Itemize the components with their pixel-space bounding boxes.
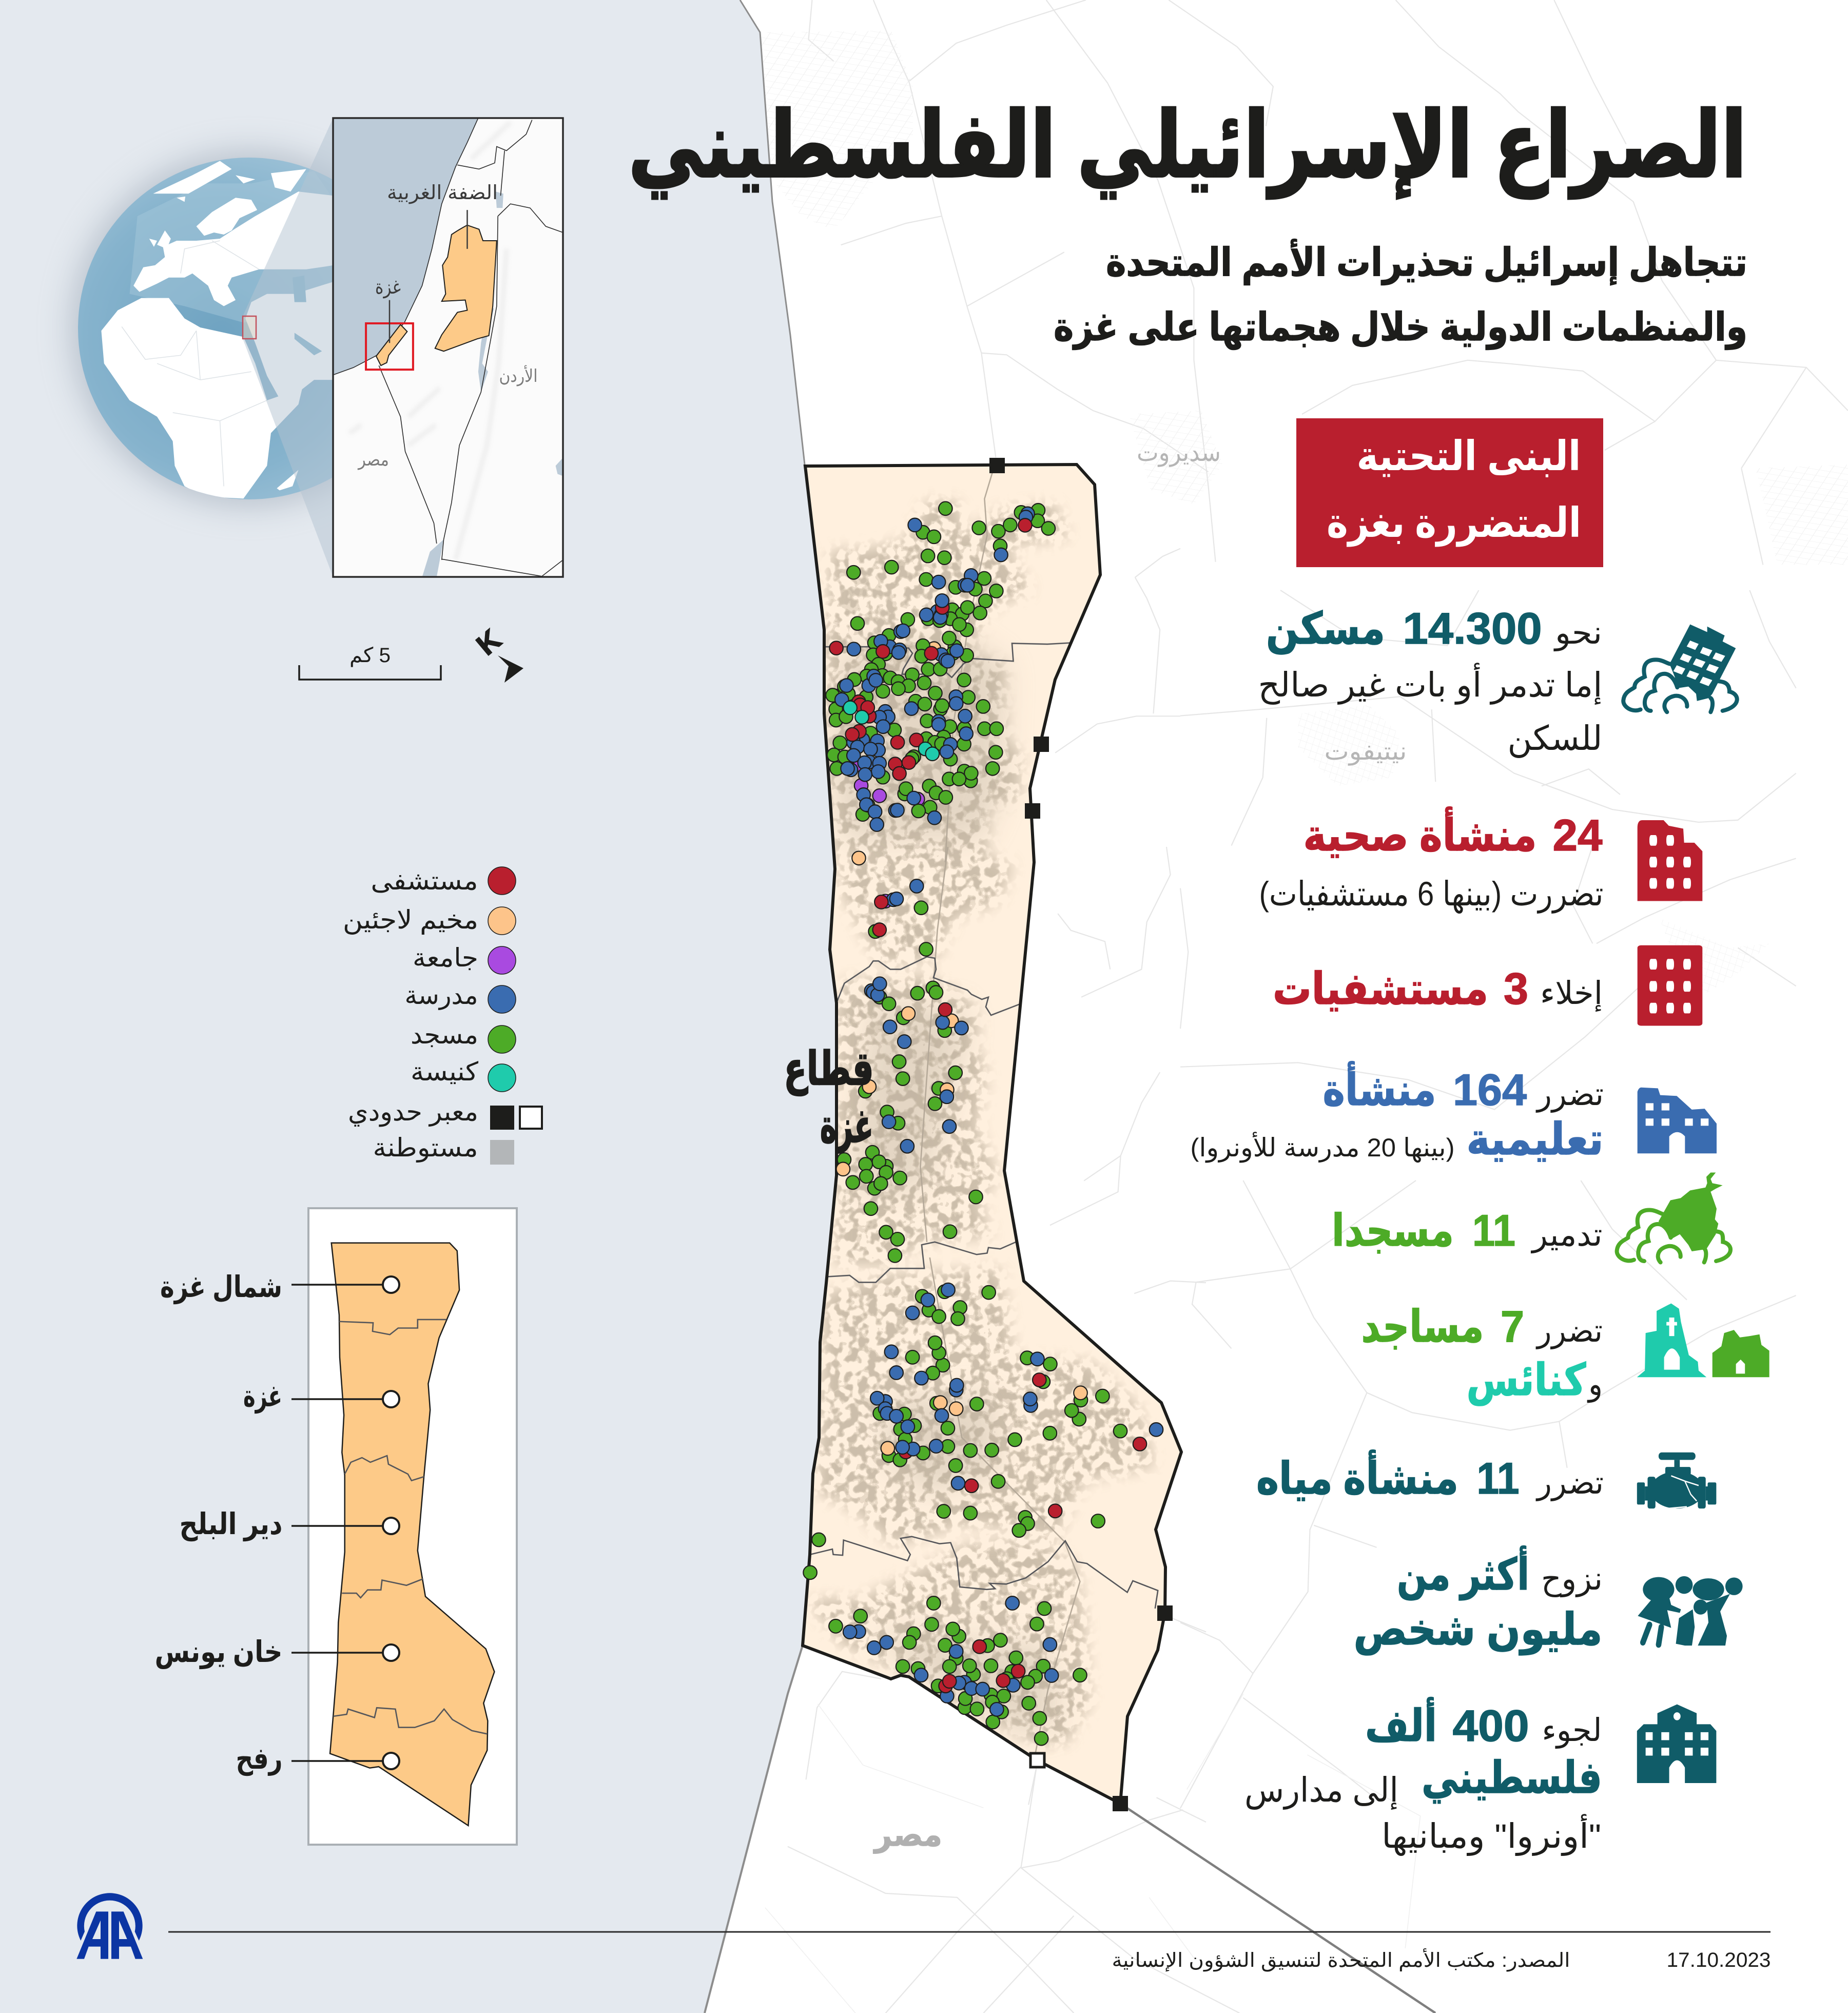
stat: education: 164 (1453, 1066, 1527, 1115)
sea and coastline (0, 0, 837, 2013)
legend: mosque: مسجد (411, 1020, 478, 1049)
icon: displaced people (1638, 1576, 1743, 1646)
icon: hospital (1638, 945, 1702, 1025)
stat: hospitals evacuated: مستشفيات (1273, 964, 1488, 1014)
icon: shelter school (1637, 1705, 1716, 1783)
stat: housing: 14.300 (1403, 604, 1542, 653)
strip fill (803, 464, 1181, 1804)
marker: Khan Younis: خان يونس (155, 1635, 282, 1670)
marker: Rafah: رفح (236, 1742, 282, 1776)
label: Gaza Strip: قطاع (784, 1043, 873, 1096)
inset locator map: مصر (357, 450, 389, 470)
legend: university (413, 943, 516, 974)
settlements texture (809, 473, 1154, 1760)
subtitle (1054, 239, 1747, 350)
legend: settlement (373, 1133, 514, 1165)
stat: mosques destroyed: 11 (1472, 1206, 1515, 1255)
legend: church: كنيسة (411, 1057, 478, 1086)
section heading box (1296, 418, 1603, 567)
stat: education: (بينها 20 مدرسة للأونروا) (1191, 1132, 1454, 1163)
icon: damaged hospital (1638, 820, 1702, 901)
district boundaries (810, 643, 1158, 1609)
stat: education: منشأة (1323, 1061, 1436, 1115)
section heading box: البنى التحتية (1357, 433, 1581, 479)
stat: hospitals evacuated: إخلاء (1540, 976, 1603, 1012)
stat: water facilities: 11 (1477, 1454, 1519, 1503)
stat: education: تضرر (1535, 1077, 1604, 1113)
stat: mosques destroyed: مسجدا (1332, 1206, 1454, 1255)
stat: water facilities (1256, 1449, 1604, 1503)
label: Netivot: نيتيفوت (1324, 738, 1407, 766)
legend: school: مدرسة (404, 981, 478, 1010)
footer (168, 1932, 1771, 1972)
stat: shelter: ألف (1365, 1697, 1437, 1751)
border crossings (989, 458, 1173, 1811)
strip outline (803, 464, 1181, 1804)
label: Sderot: سديروت (1137, 439, 1221, 467)
globe (59, 138, 333, 519)
marker: Khan Younis (155, 1635, 399, 1670)
stat: water facilities: منشأة مياه (1256, 1449, 1458, 1503)
stat: mosques and churches damaged (1361, 1302, 1603, 1406)
legend (343, 866, 542, 1165)
stat: shelter: لجوء (1542, 1713, 1602, 1749)
inset locator map (333, 118, 563, 577)
stat: housing: إما تدمر أو بات غير صالح (1258, 663, 1602, 705)
stat: mosques and churches damaged: 7 (1501, 1302, 1524, 1351)
icon: destroyed mosque (1617, 1173, 1730, 1263)
stat: shelter: فلسطيني (1422, 1753, 1602, 1804)
source: المصدر: مكتب الأمم المتحدة لتنسيق الشؤون الإنسانية (1112, 1948, 1570, 1972)
label: Egypt: مصر (873, 1817, 942, 1853)
legend: settlement: مستوطنة (373, 1133, 478, 1163)
stat: health facilities: 24 (1553, 811, 1603, 860)
damaged sites: middle (837, 879, 983, 1263)
inset locator map: غزة (375, 277, 401, 299)
stat: displaced: أكثر من (1397, 1545, 1529, 1600)
land road network (762, 0, 1848, 2013)
stat: mosques and churches damaged: مساجد (1361, 1302, 1484, 1351)
legend: border crossing: معبر حدودي (348, 1097, 478, 1127)
stat: mosques destroyed: تدمير (1530, 1217, 1602, 1253)
stat: mosques and churches damaged: تضرر (1535, 1313, 1603, 1349)
stat: health facilities (1259, 806, 1603, 914)
stat: health facilities: تضررت (بينها 6 مستشفيات) (1259, 875, 1603, 914)
date: 17.10.2023 (1667, 1949, 1771, 1971)
stat: housing: نحو (1553, 615, 1602, 651)
legend: hospital: مستشفى (371, 866, 478, 895)
marker: Gaza: غزة (243, 1380, 282, 1414)
section heading box: المتضررة بغزة (1327, 500, 1581, 547)
subtitle: والمنظمات الدولية خلال هجماتها على غزة (1054, 305, 1747, 350)
north arrow (470, 623, 523, 683)
legend: school (404, 981, 516, 1013)
stat: health facilities: منشأة صحية (1304, 806, 1536, 860)
stat: displaced: مليون شخص (1354, 1605, 1602, 1655)
subtitle: تتجاهل إسرائيل تحذيرات الأمم المتحدة (1106, 239, 1747, 285)
marker: North Gaza: شمال غزة (160, 1270, 282, 1305)
icon: school (1638, 1088, 1717, 1153)
label: Gaza Strip: غزة (820, 1101, 873, 1153)
marker: Deir al-Balah (180, 1507, 399, 1542)
icon: broken valve (1637, 1453, 1716, 1508)
stat: mosques and churches damaged: و (1587, 1367, 1603, 1403)
logo: AA (76, 1893, 143, 1959)
stat: displaced: نزوح (1541, 1561, 1603, 1597)
legend: mosque (411, 1020, 516, 1053)
icon: small mosque (1713, 1330, 1769, 1377)
marker: Rafah (236, 1742, 399, 1776)
inset locator map: الأردن (499, 365, 538, 386)
zoom wedge from globe to inset (243, 118, 333, 577)
stat: housing (1258, 604, 1602, 758)
egypt border line (1120, 1804, 1435, 2013)
icon: church (1637, 1303, 1706, 1377)
map: Gaza Strip (803, 458, 1181, 1811)
legend: border crossing (348, 1097, 542, 1130)
legend: university: جامعة (413, 943, 478, 972)
stat: education: تعليمية (1467, 1115, 1603, 1164)
stat: education (1191, 1061, 1604, 1164)
stat: shelter: "أونروا" ومبانيها (1382, 1814, 1601, 1856)
scale bar (299, 644, 441, 680)
marker: North Gaza (160, 1270, 399, 1305)
stat: hospitals evacuated: 3 (1504, 964, 1528, 1014)
stat: mosques destroyed (1332, 1206, 1602, 1255)
damaged sites: north (826, 501, 1055, 865)
damaged sites: south (803, 1283, 1163, 1746)
panel: governorates map (155, 1208, 517, 1845)
stat: shelter: إلى مدارس (1244, 1771, 1398, 1810)
stat: shelter (1244, 1697, 1602, 1856)
marker: Deir al-Balah: دير البلح (180, 1507, 282, 1542)
stat: mosques and churches damaged: كنائس (1467, 1356, 1586, 1406)
stat: housing: مسكن (1266, 604, 1385, 654)
legend: refugee camp: مخيم لاجئين (343, 905, 478, 935)
stat: shelter: 400 (1452, 1701, 1529, 1751)
inset locator map: الضفة الغربية (387, 182, 498, 204)
stat: water facilities: تضرر (1535, 1465, 1604, 1501)
stat: displaced (1354, 1545, 1603, 1655)
north arrow: K (470, 623, 507, 661)
legend: church (411, 1057, 516, 1092)
scale bar: 5 كم (349, 644, 391, 667)
label: Gaza Strip (784, 1043, 873, 1153)
stat: housing: للسكن (1508, 719, 1602, 758)
globe location marker (243, 316, 256, 339)
icon: collapsed building (1623, 625, 1737, 712)
marker: Gaza (243, 1380, 399, 1414)
